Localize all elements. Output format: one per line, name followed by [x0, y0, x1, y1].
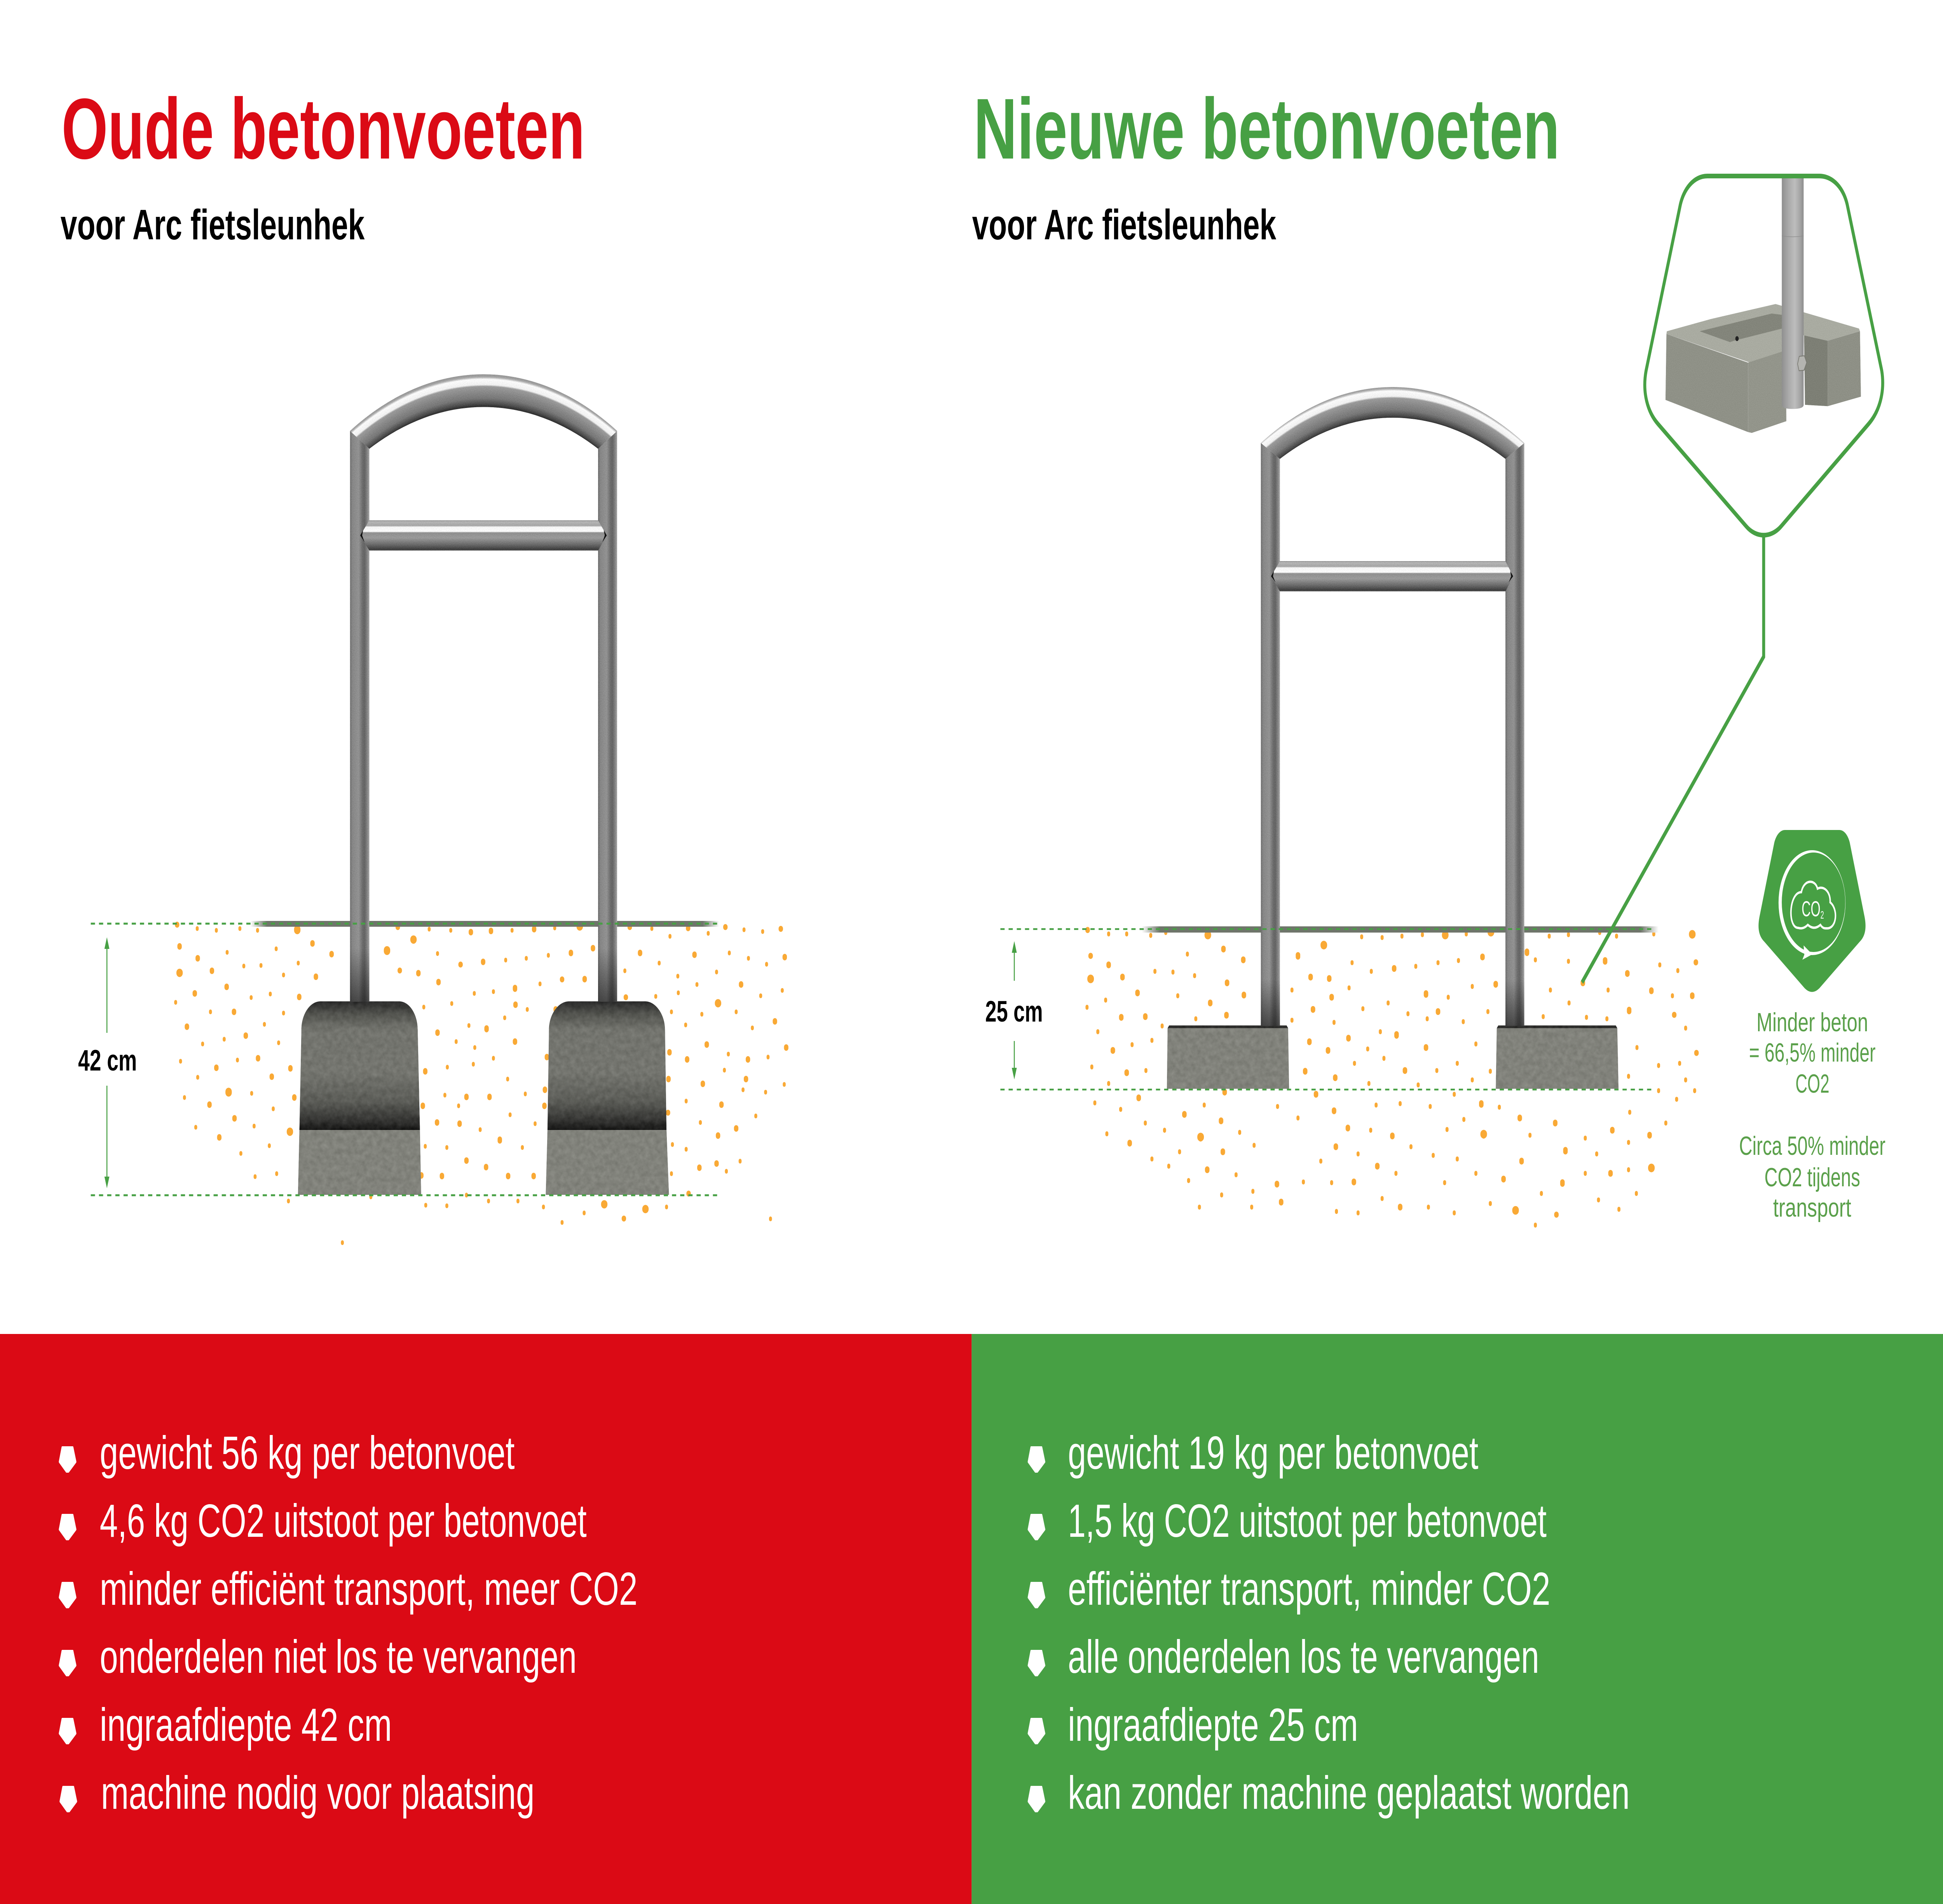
list: old foot facts: 4,6 kg CO2 uitstoot per betonvoet — [100, 1495, 587, 1547]
subtitle left: voor Arc fietsleunhek — [61, 201, 365, 249]
CO2 icon label: 2 — [1821, 909, 1824, 921]
list: new foot facts: 1,5 kg CO2 uitstoot per betonvoet — [1068, 1495, 1547, 1547]
arc rack new — [1261, 387, 1524, 1026]
text: CO2 savings — [1739, 1008, 1885, 1222]
CO2 icon label: CO — [1802, 896, 1823, 921]
panel: green facts — [972, 1334, 1943, 1904]
list: new foot facts: ingraafdiepte 25 cm — [1068, 1699, 1358, 1751]
list: new foot facts: kan zonder machine geplaatst worden — [1068, 1767, 1630, 1819]
concrete foot left 2 — [546, 1001, 669, 1195]
ground line right — [1142, 926, 1659, 933]
depth arrow 42 cm — [78, 937, 137, 1188]
callout leader line — [1582, 534, 1763, 982]
panel: nieuwe betonvoeten — [972, 81, 1885, 1226]
bullets right — [1028, 1447, 1045, 1811]
soil dots right — [1087, 929, 1697, 1226]
concrete block with pole — [1666, 178, 1861, 433]
list: new foot facts: efficiënter transport, minder CO2 — [1068, 1563, 1551, 1615]
list: new foot facts: alle onderdelen los te vervangen — [1068, 1631, 1539, 1683]
concrete foot right 2 — [1496, 1025, 1619, 1089]
arc rack old — [350, 374, 617, 1002]
bullets left — [59, 1447, 77, 1811]
panel: oude betonvoeten — [61, 81, 786, 1243]
ground line left — [251, 921, 719, 927]
list: new foot facts: gewicht 19 kg per betonvoet — [1068, 1427, 1478, 1479]
soil dots left — [176, 924, 786, 1243]
concrete foot right 1 — [1167, 1025, 1289, 1089]
text: CO2 savings: = 66,5% minder — [1749, 1038, 1875, 1067]
concrete foot left 1 — [298, 1001, 421, 1195]
list: old foot facts: machine nodig voor plaatsing — [101, 1767, 535, 1819]
text: CO2 savings: CO2 — [1795, 1069, 1830, 1098]
text: CO2 savings: Minder beton — [1756, 1008, 1868, 1037]
list: old foot facts: onderdelen niet los te vervangen — [100, 1631, 577, 1683]
text: CO2 savings: CO2 tijdens — [1764, 1163, 1860, 1192]
panel: red facts — [0, 1334, 972, 1904]
title: nieuwe betonvoeten: Nieuwe betonvoeten — [973, 81, 1560, 177]
depth guide lines right — [1000, 929, 1655, 1090]
depth label 42 cm: 42 cm — [78, 1044, 137, 1077]
list: new foot facts — [1068, 1427, 1630, 1819]
list: old foot facts: gewicht 56 kg per betonvoet — [100, 1427, 515, 1479]
list: old foot facts — [100, 1427, 637, 1819]
callout pentagon outline — [1645, 176, 1883, 535]
title: oude betonvoeten: Oude betonvoeten — [61, 81, 585, 177]
subtitle right: voor Arc fietsleunhek — [972, 201, 1277, 249]
text: CO2 savings: transport — [1773, 1193, 1851, 1222]
callout: foot detail — [1645, 176, 1883, 535]
list: old foot facts: minder efficiënt transport, meer CO2 — [100, 1563, 637, 1615]
list: old foot facts: ingraafdiepte 42 cm — [100, 1699, 392, 1751]
depth guide lines left — [91, 924, 719, 1195]
text: CO2 savings: Circa 50% minder — [1739, 1131, 1885, 1161]
icon: CO2 badge — [1758, 830, 1866, 992]
depth arrow 25 cm — [985, 941, 1043, 1079]
depth label 25 cm: 25 cm — [985, 995, 1043, 1028]
